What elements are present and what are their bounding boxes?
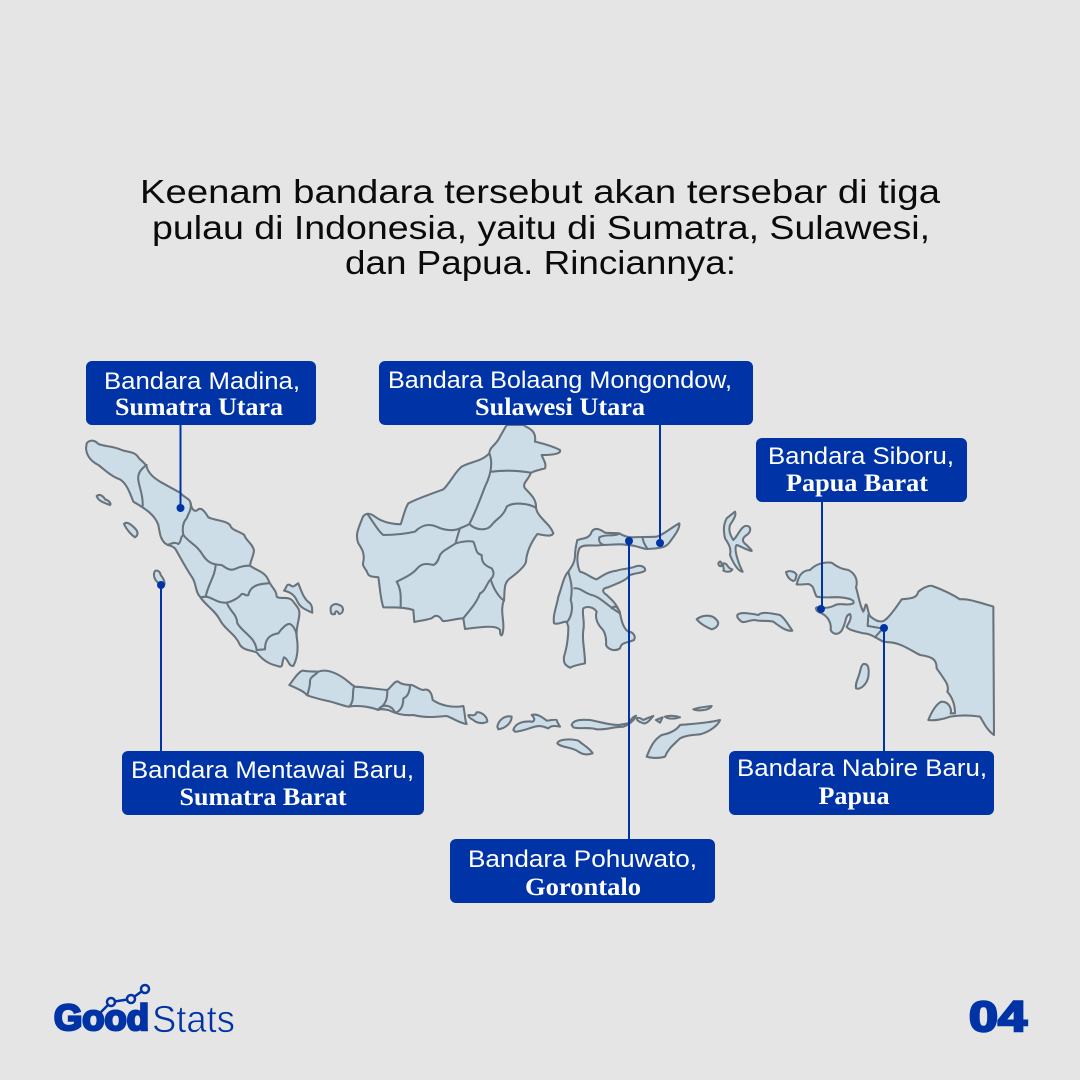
title: dan Papua. Rinciannya: — [345, 244, 736, 281]
label: Bandara Bolaang Mongondow: Sulawesi Utara — [475, 394, 646, 421]
label: Bandara Madina — [86, 361, 316, 512]
map: Sumatra — [86, 441, 343, 667]
label: Bandara Madina: Bandara Madina, — [104, 368, 300, 395]
title: Keenam bandara tersebut akan tersebar di tiga — [140, 173, 941, 210]
label: Bandara Siboru — [756, 438, 967, 613]
logo: GoodStats — [54, 985, 235, 1041]
map of Indonesia — [86, 425, 994, 758]
label: Bandara Nabire Baru: Papua — [818, 783, 890, 810]
title: pulau di Indonesia, yaitu di Sumatra, Sulawesi, — [152, 209, 930, 246]
label: Bandara Bolaang Mongondow — [379, 361, 753, 547]
label: Bandara Pohuwato — [450, 537, 715, 903]
label: Bandara Nabire Baru: Bandara Nabire Baru, — [737, 755, 987, 782]
title — [140, 173, 941, 281]
label: Bandara Mentawai Baru: Bandara Mentawai Baru, — [131, 757, 414, 784]
label: Bandara Madina: Sumatra Utara — [115, 394, 284, 421]
label: Bandara Siboru: Bandara Siboru, — [768, 443, 954, 470]
map: Java and Bali — [289, 671, 487, 724]
logo: GoodStats: Good — [54, 997, 149, 1038]
label: Bandara Nabire Baru — [729, 624, 994, 815]
map: Papua, Seram and Halmahera — [718, 512, 994, 735]
label: Bandara Mentawai Baru — [122, 581, 424, 815]
page number: 04 — [969, 993, 1027, 1041]
label: Bandara Mentawai Baru: Sumatra Barat — [180, 784, 347, 811]
logo: GoodStats: Stats — [152, 999, 235, 1041]
map: Maluku and Nusa Tenggara islands — [497, 616, 720, 758]
label: Bandara Bolaang Mongondow: Bandara Bolaang Mongondow, — [388, 367, 732, 394]
label: Bandara Siboru: Papua Barat — [786, 470, 929, 497]
map: Kalimantan — [357, 425, 560, 635]
label: Bandara Pohuwato: Gorontalo — [525, 874, 641, 901]
map: Sulawesi — [554, 523, 679, 668]
label: Bandara Pohuwato: Bandara Pohuwato, — [468, 846, 697, 873]
